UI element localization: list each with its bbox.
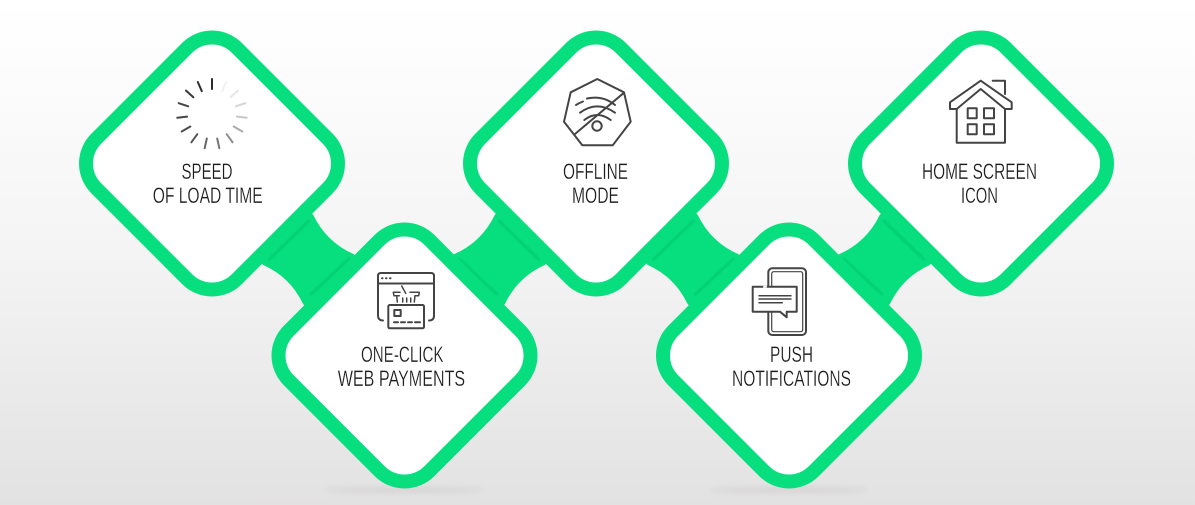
panel: home screen icon bbox=[840, 23, 1122, 304]
icon: house bbox=[950, 81, 1012, 143]
label: one-click web payments bbox=[338, 342, 465, 391]
icon: loading spinner bbox=[177, 79, 247, 148]
label: home screen icon: ICON bbox=[961, 183, 998, 208]
label: home screen icon bbox=[922, 159, 1037, 208]
label: push notifications: NOTIFICATIONS bbox=[732, 366, 851, 391]
shadow under push panel bbox=[709, 487, 869, 493]
panel: push notifications bbox=[648, 215, 930, 496]
label: offline mode: OFFLINE bbox=[563, 159, 628, 184]
connector: speed to payments bbox=[258, 210, 358, 310]
label: one-click web payments: WEB PAYMENTS bbox=[338, 366, 465, 391]
label: push notifications: PUSH bbox=[770, 342, 813, 367]
icon: browser with basket and card bbox=[378, 273, 434, 328]
label: speed of load time bbox=[153, 159, 263, 208]
icon: crossed-out wifi in heptagon bbox=[564, 79, 631, 145]
panel: speed of load time bbox=[71, 23, 353, 304]
label: offline mode bbox=[563, 159, 628, 208]
label: one-click web payments: ONE-CLICK bbox=[361, 342, 444, 367]
label: push notifications bbox=[732, 342, 851, 391]
shadow under one-click panel bbox=[324, 487, 484, 493]
label: speed of load time: SPEED bbox=[182, 159, 232, 184]
label: speed of load time: OF LOAD TIME bbox=[153, 183, 263, 208]
connector: push to home screen bbox=[835, 210, 935, 310]
panel: one-click web payments bbox=[264, 215, 545, 496]
connector: offline to push bbox=[642, 210, 742, 310]
connector: payments to offline bbox=[450, 210, 550, 310]
panel: offline mode bbox=[455, 23, 737, 304]
icon: phone with message bubble bbox=[753, 268, 806, 335]
label: offline mode: MODE bbox=[572, 183, 619, 208]
label: home screen icon: HOME SCREEN bbox=[922, 159, 1037, 184]
